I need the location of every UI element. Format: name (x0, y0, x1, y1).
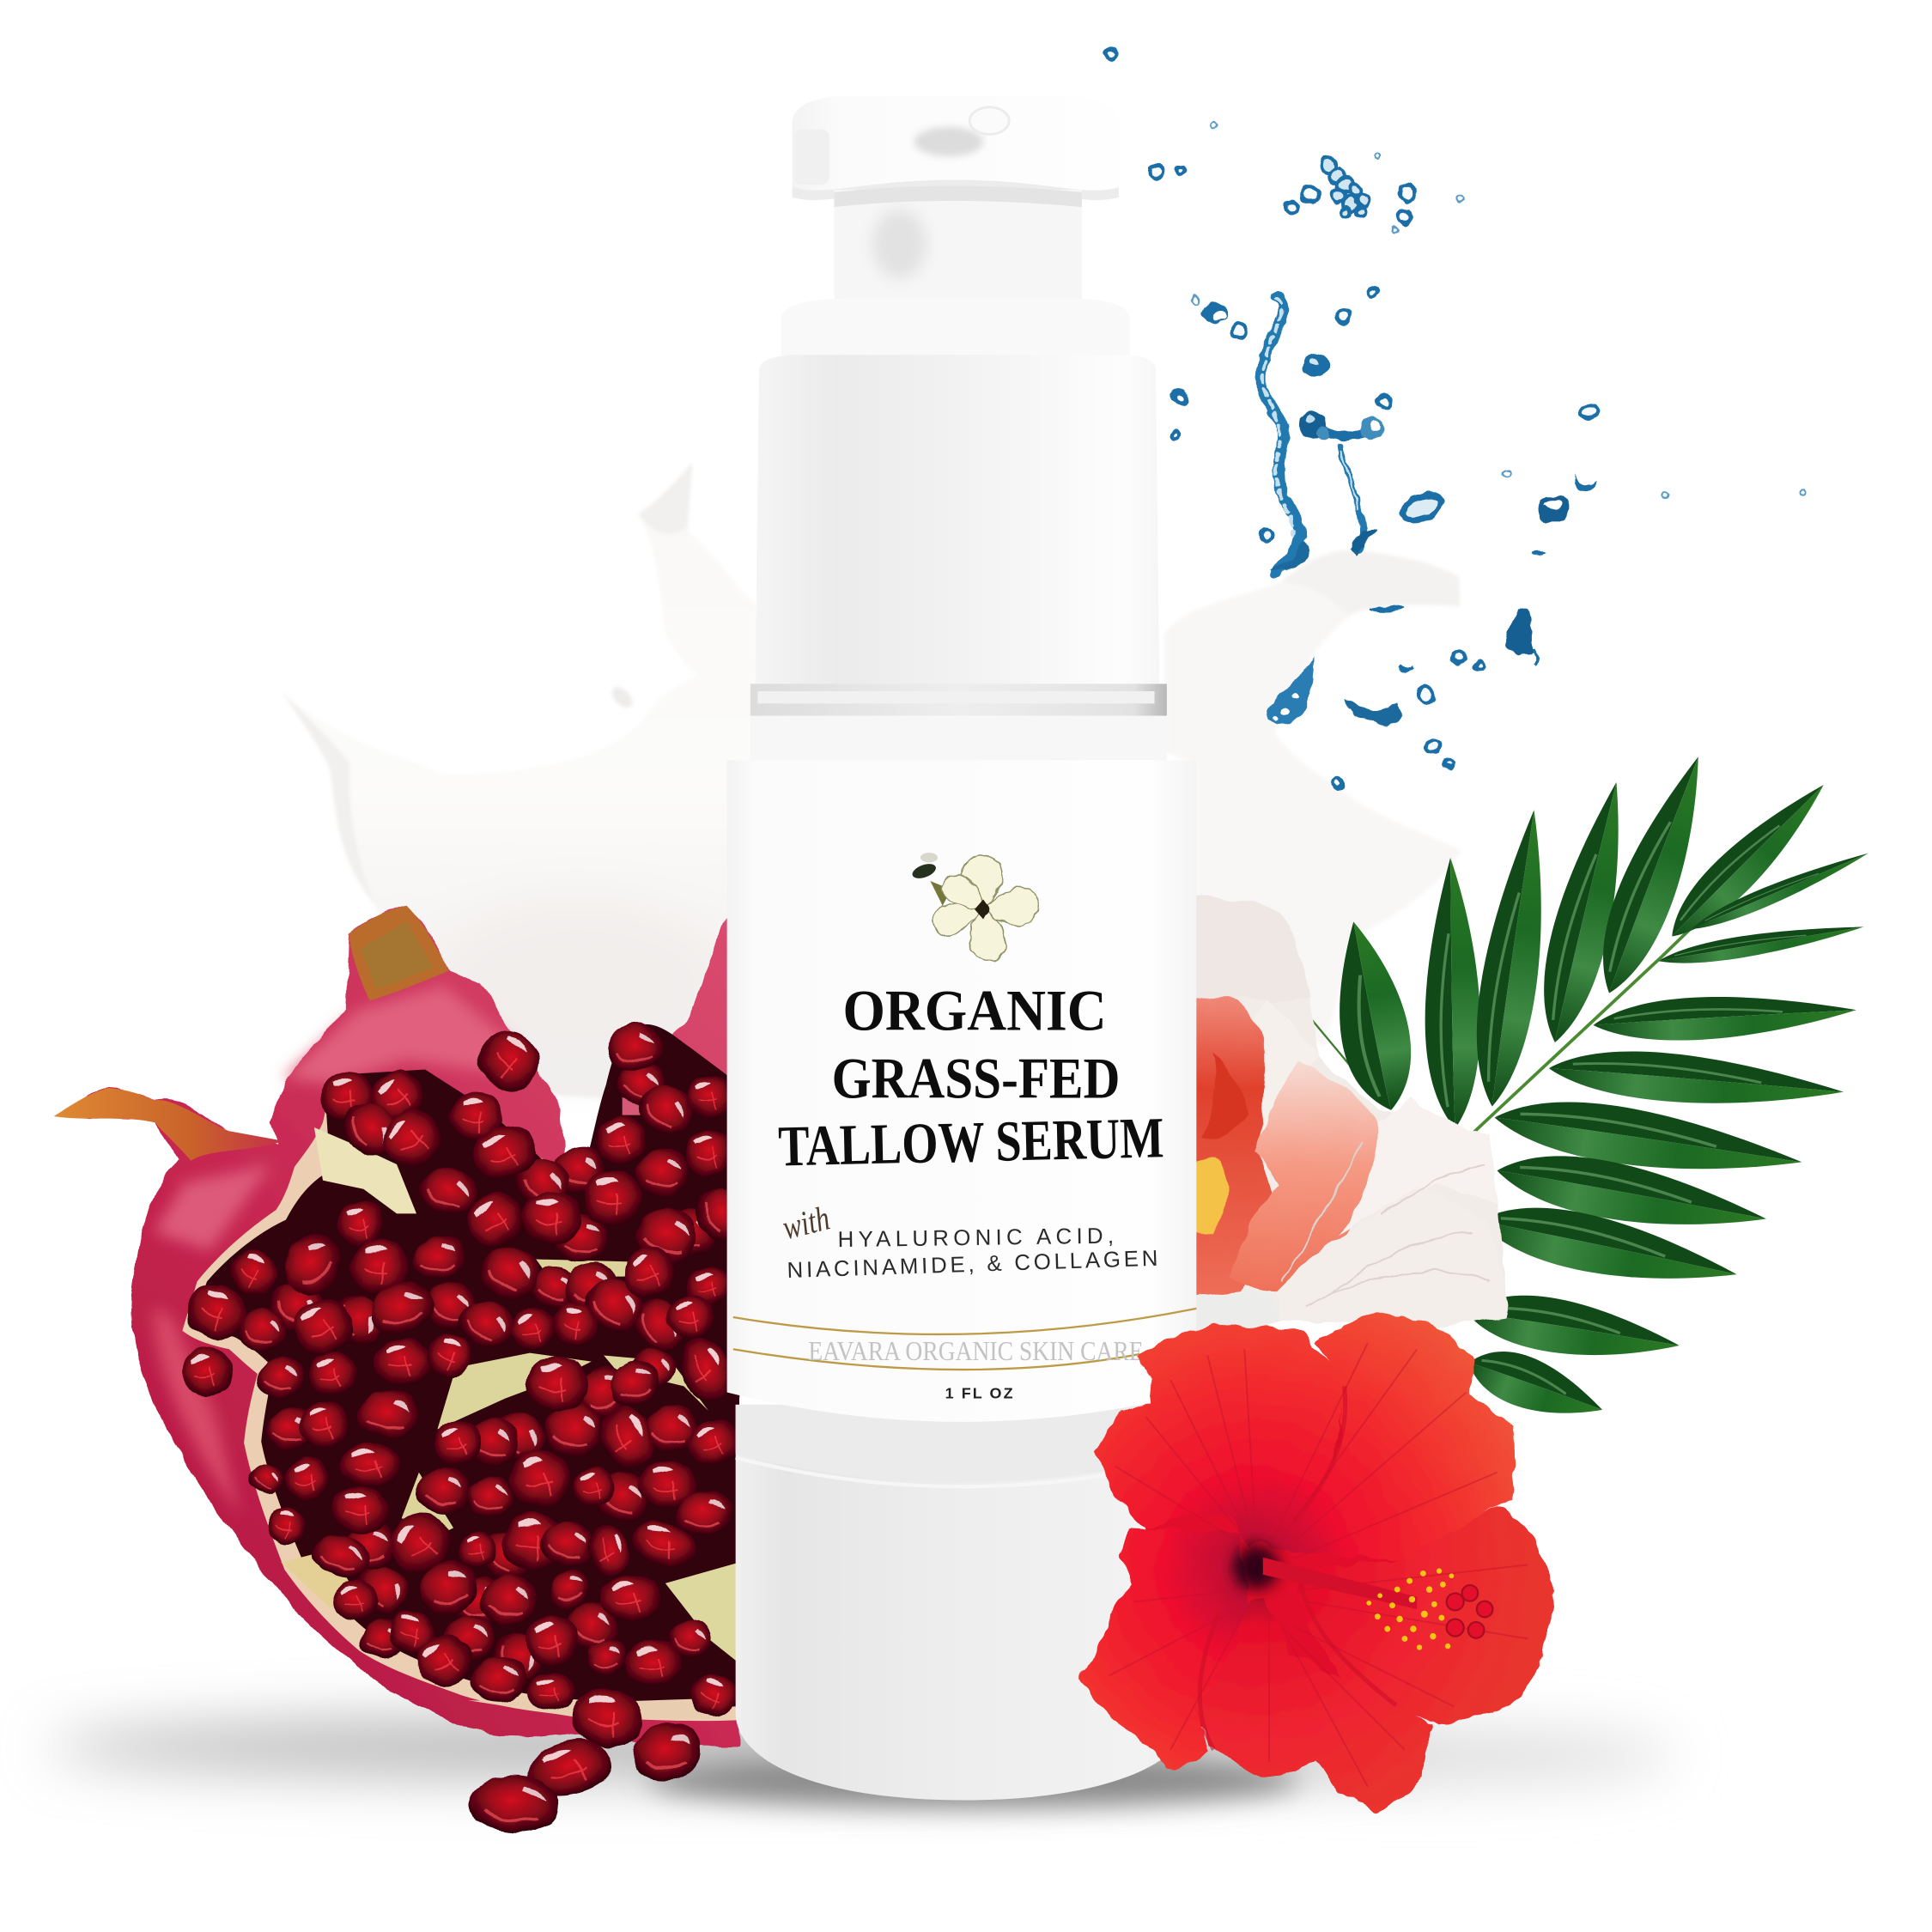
dark interior (191, 1070, 739, 1706)
with script: with (779, 1198, 834, 1247)
label (727, 760, 1196, 1422)
milk splash right (1164, 550, 1461, 1048)
lower right white petal (1277, 1185, 1508, 1327)
stigma (1447, 1585, 1492, 1638)
white and coral flower (1183, 896, 1508, 1342)
water stream one (1261, 295, 1301, 573)
rind (54, 906, 739, 1746)
pomegranate (54, 906, 755, 1837)
base groove (736, 1458, 1192, 1486)
stamen (1189, 1158, 1229, 1235)
coral inner fold (1201, 1054, 1247, 1139)
palm frond (1306, 747, 1872, 1434)
membrane patches (314, 1127, 416, 1213)
flower throat (1235, 1545, 1279, 1589)
volume: 1 FL OZ (945, 1385, 1013, 1402)
lower base (736, 1405, 1192, 1800)
upper body (756, 355, 1159, 685)
gold lines (733, 1309, 1196, 1370)
shoulder (750, 716, 1167, 762)
crown (349, 906, 448, 1000)
petal folds (1200, 1386, 1396, 1750)
ingredients: NIACINAMIDE, & COLLAGEN (787, 1247, 1158, 1283)
fallen arils (465, 1681, 702, 1837)
collar ring (781, 298, 1130, 360)
petal veins (1109, 1343, 1528, 1787)
clear band (750, 683, 1167, 716)
serum bottle (727, 96, 1196, 1800)
pump cap (793, 96, 1119, 200)
product name (778, 979, 1164, 1178)
milk splash left (281, 462, 757, 1109)
right petal (1297, 1506, 1555, 1726)
filler arils (261, 1055, 755, 1690)
bottom petal (1195, 1598, 1431, 1815)
coral centre (1183, 998, 1277, 1298)
red hibiscus (1078, 1309, 1555, 1815)
stem spur (54, 1088, 283, 1161)
left petal (1078, 1527, 1250, 1770)
product name: ORGANIC (843, 979, 1107, 1043)
upper left petal (1094, 1325, 1345, 1549)
arils (177, 1019, 755, 1725)
water cluster top (1321, 158, 1369, 217)
product name: GRASS-FED (832, 1047, 1120, 1111)
main arils (177, 1019, 744, 1725)
ground shadow (49, 1715, 1676, 1807)
water stream two (1312, 424, 1373, 550)
water splash droplets (1106, 49, 1805, 788)
ingredients (787, 1224, 1158, 1283)
upper right petal (1261, 1309, 1515, 1563)
cream flesh (182, 1078, 739, 1721)
side white petal (1230, 1000, 1317, 1157)
pump collar (834, 186, 1082, 301)
hibiscus base (1133, 1368, 1479, 1737)
dark upper-right cluster (579, 1024, 739, 1232)
bee (910, 853, 938, 881)
brand line: EAVARA ORGANIC SKIN CARE (808, 1336, 1144, 1366)
stamen column (1263, 1558, 1417, 1609)
product name: TALLOW SERUM (778, 1105, 1164, 1178)
pink petal (1230, 1060, 1378, 1292)
pink rind fragment (623, 1083, 690, 1131)
pollen (1366, 1568, 1454, 1650)
flower base (1183, 900, 1508, 1342)
top white petal (1183, 896, 1309, 1014)
right white petal (1338, 1097, 1497, 1235)
lower white petal (1183, 1292, 1281, 1342)
ingredients: HYALURONIC ACID, (837, 1224, 1114, 1252)
rind mottling (154, 986, 518, 1516)
petal creases (1281, 1139, 1491, 1306)
water blobs (1170, 303, 1597, 726)
flower logo (910, 853, 1038, 961)
